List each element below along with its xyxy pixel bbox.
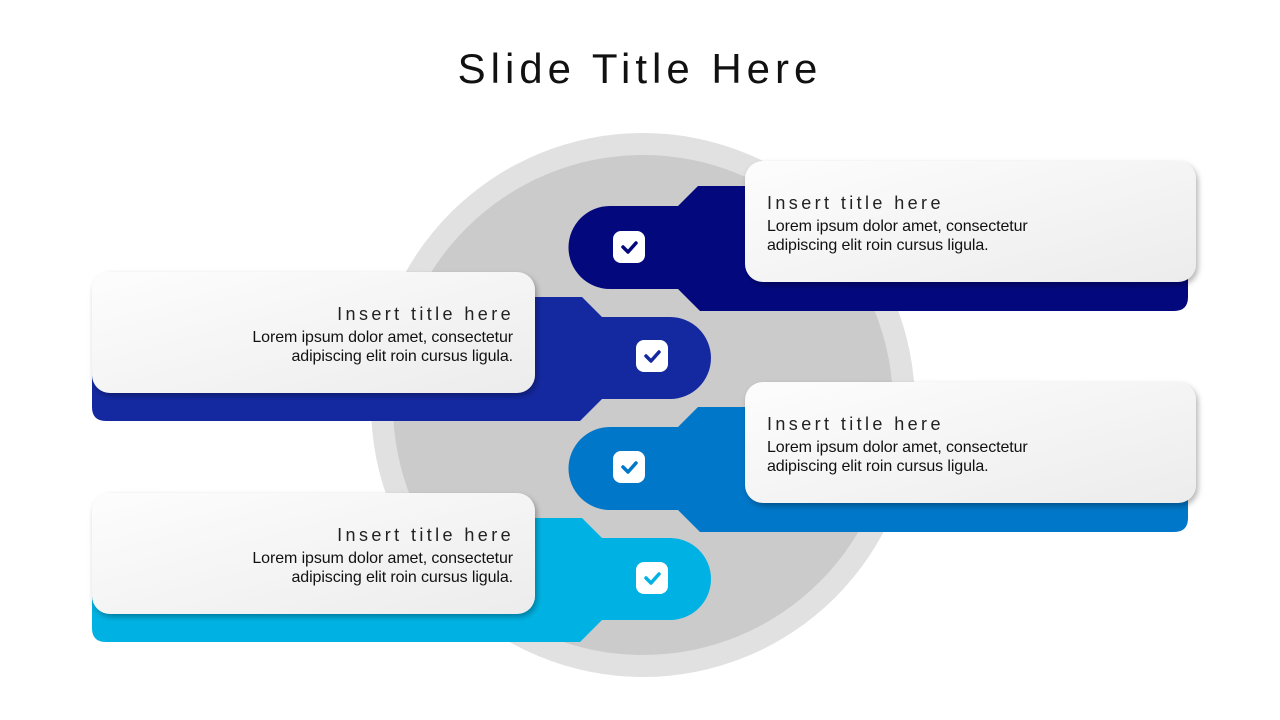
text 1: [767, 193, 1028, 254]
text 3: Lorem ipsum dolor amet, consectetur: [767, 439, 1028, 456]
icon: check 1: [613, 231, 645, 263]
text 3: [767, 414, 1028, 475]
text 4: Lorem ipsum dolor amet, consectetur: [252, 550, 513, 567]
background circle: [371, 133, 915, 677]
text 2: Insert title here: [337, 304, 514, 324]
card 3: [745, 382, 1196, 503]
text 2: adipiscing elit roin cursus ligula.: [291, 348, 513, 365]
icon: check 4: [636, 562, 668, 594]
icon: check 2: [636, 340, 668, 372]
step 2 shape: [92, 297, 711, 421]
text 4: [252, 525, 514, 586]
card 2: [92, 272, 535, 393]
title: Slide Title Here: [458, 45, 822, 92]
step 3 shape: [568, 407, 1188, 532]
text 4: adipiscing elit roin cursus ligula.: [291, 569, 513, 586]
text 3: adipiscing elit roin cursus ligula.: [767, 458, 989, 475]
text 2: Lorem ipsum dolor amet, consectetur: [252, 329, 513, 346]
text 1: Insert title here: [767, 193, 944, 213]
step 4 shape: [92, 518, 711, 642]
card 1: [745, 161, 1196, 282]
text 1: adipiscing elit roin cursus ligula.: [767, 237, 989, 254]
text 2: [252, 304, 514, 365]
text 3: Insert title here: [767, 414, 944, 434]
text 4: Insert title here: [337, 525, 514, 545]
step 1 shape: [568, 186, 1188, 311]
card 4: [92, 493, 535, 614]
icon: check 3: [613, 451, 645, 483]
text 1: Lorem ipsum dolor amet, consectetur: [767, 218, 1028, 235]
